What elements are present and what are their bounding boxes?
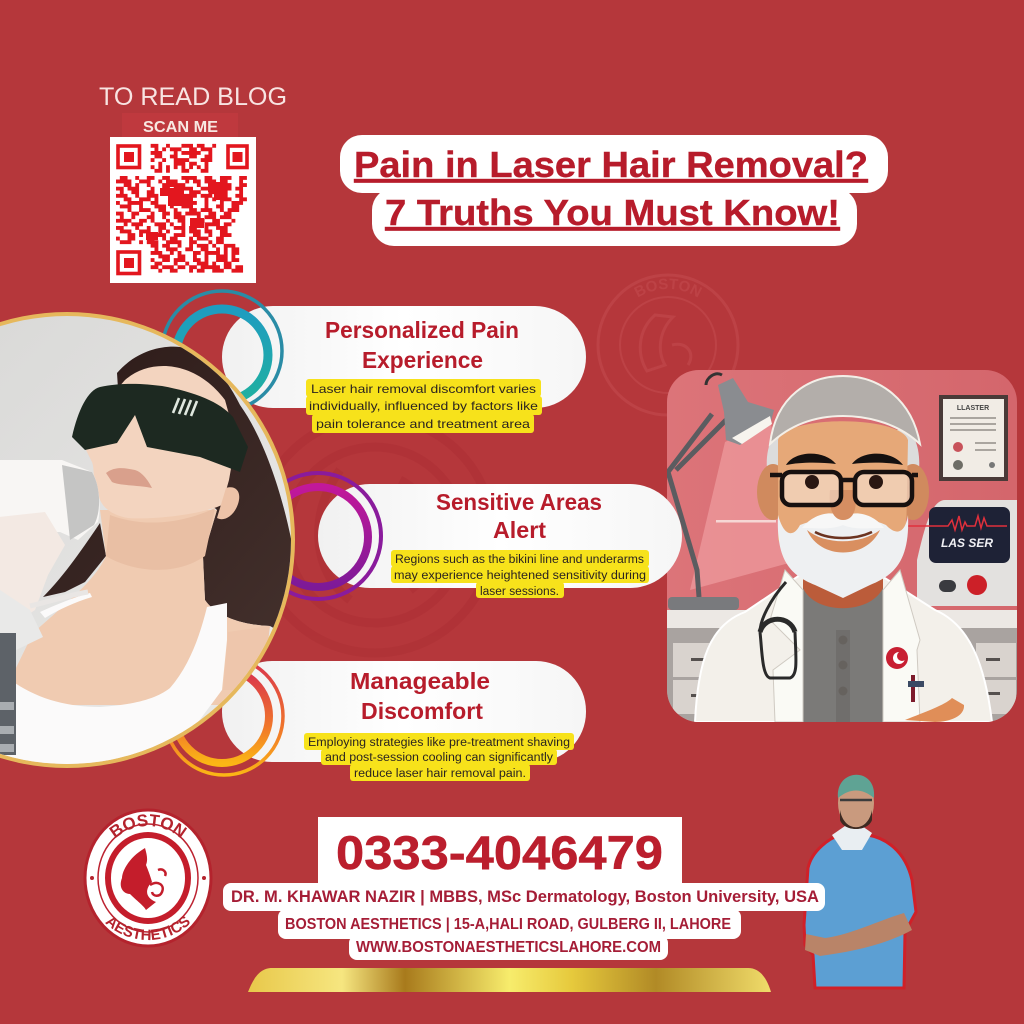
laser beam [716, 520, 776, 522]
title panel [340, 135, 888, 246]
warm rings [165, 657, 283, 775]
scan me label [122, 113, 238, 137]
photo: surgeon in blue scrubs [804, 775, 916, 988]
mustache [802, 513, 884, 528]
neck and chest [15, 510, 270, 705]
gloved hand [0, 512, 65, 620]
kufi cap [770, 376, 920, 444]
white coat [695, 575, 992, 722]
laser device [0, 460, 100, 540]
heading: Manageable [350, 668, 490, 694]
laser machine [905, 500, 1020, 606]
doctor credentials [223, 883, 825, 911]
heading: Discomfort [361, 698, 483, 724]
QR code [110, 137, 256, 283]
website [349, 935, 668, 960]
pen [911, 675, 915, 702]
nose [830, 490, 856, 520]
scan me label: SCAN ME [143, 119, 218, 136]
lips [106, 468, 152, 488]
highlighted description: individually, influenced by factors like [309, 399, 538, 413]
highlighted description: reduce laser hair removal pain. [354, 768, 526, 780]
beard [778, 515, 908, 598]
laser machine: LAS SER [941, 536, 993, 550]
title text line 1: Pain in Laser Hair Removal? [354, 144, 868, 185]
highlighted description [304, 733, 574, 781]
highlighted description: may experience heightened sensitivity during [394, 570, 646, 582]
eyes [805, 475, 883, 489]
goggles [72, 384, 248, 472]
highlighted description: pain tolerance and treatment area [316, 417, 530, 431]
crossed arm [905, 698, 964, 722]
heading [325, 317, 519, 373]
logo: Boston Aesthetics [84, 808, 212, 948]
illustration: cartoon doctor [667, 370, 1020, 722]
heading [350, 668, 490, 724]
device handle [0, 633, 16, 755]
panel: sensitive areas alert [255, 473, 682, 599]
counter and cabinets [667, 610, 1017, 628]
glasses [770, 472, 918, 505]
highlighted description: and post-session cooling can significantly [325, 752, 553, 764]
purple rings [255, 473, 381, 599]
heading: Alert [493, 517, 546, 543]
clinic address: BOSTON AESTHETICS | 15-A,HALI ROAD, GULBERG II, LAHORE [285, 916, 731, 933]
desk lamp [668, 374, 774, 610]
highlighted description: laser sessions. [480, 586, 559, 598]
framed certificate: LLASTER [957, 405, 989, 412]
heading: Experience [362, 347, 483, 373]
phone number [318, 817, 682, 887]
title text line 2: 7 Truths You Must Know! [385, 192, 840, 233]
gold bar [248, 968, 771, 992]
side hair [766, 430, 920, 466]
face [778, 421, 908, 541]
framed certificate [939, 395, 1008, 481]
neck [803, 575, 883, 608]
highlighted description [306, 379, 542, 433]
logo: Boston Aesthetics: BOSTON [109, 814, 188, 838]
panel: manageable discomfort [165, 657, 586, 781]
coat lapels [770, 570, 803, 722]
watermark: faint logo top right: BOSTON [634, 278, 702, 297]
lamp light cone [690, 424, 786, 590]
clinic address [278, 909, 741, 939]
highlighted description: Employing strategies like pre-treatment shaving [308, 737, 570, 749]
watermark: faint logo top right [596, 274, 740, 416]
website: WWW.BOSTONAESTHETICSLAHORE.COM [356, 939, 661, 956]
hair [43, 347, 295, 640]
white tank top [0, 603, 227, 775]
panel: personalized pain experience [162, 291, 586, 433]
highlighted description: Regions such as the bikini line and underarms [395, 554, 644, 566]
ears [757, 464, 778, 520]
watermark: large faint logo behind panels [257, 417, 493, 653]
logo: Boston Aesthetics: AESTHETICS [105, 916, 190, 940]
heading [436, 489, 602, 543]
highlighted description: Laser hair removal discomfort varies [311, 382, 536, 396]
highlighted description [391, 550, 649, 598]
contact block [223, 817, 825, 960]
heading: Sensitive Areas [436, 489, 602, 515]
badge [886, 647, 908, 669]
phone number: 0333-4046479 [336, 826, 663, 879]
stethoscope [760, 582, 796, 678]
kurta [803, 585, 883, 722]
photo: woman receiving laser treatment [0, 310, 300, 775]
doctor credentials: DR. M. KHAWAR NAZIR | MBBS, MSc Dermatology, Boston University, USA [231, 888, 819, 906]
ear [217, 487, 239, 519]
arm skin [234, 626, 270, 690]
eyebrows [786, 454, 903, 465]
blog prompt heading: TO READ BLOG [99, 83, 287, 111]
face [85, 366, 236, 518]
heading: Personalized Pain [325, 317, 519, 343]
teal rings [162, 291, 282, 411]
